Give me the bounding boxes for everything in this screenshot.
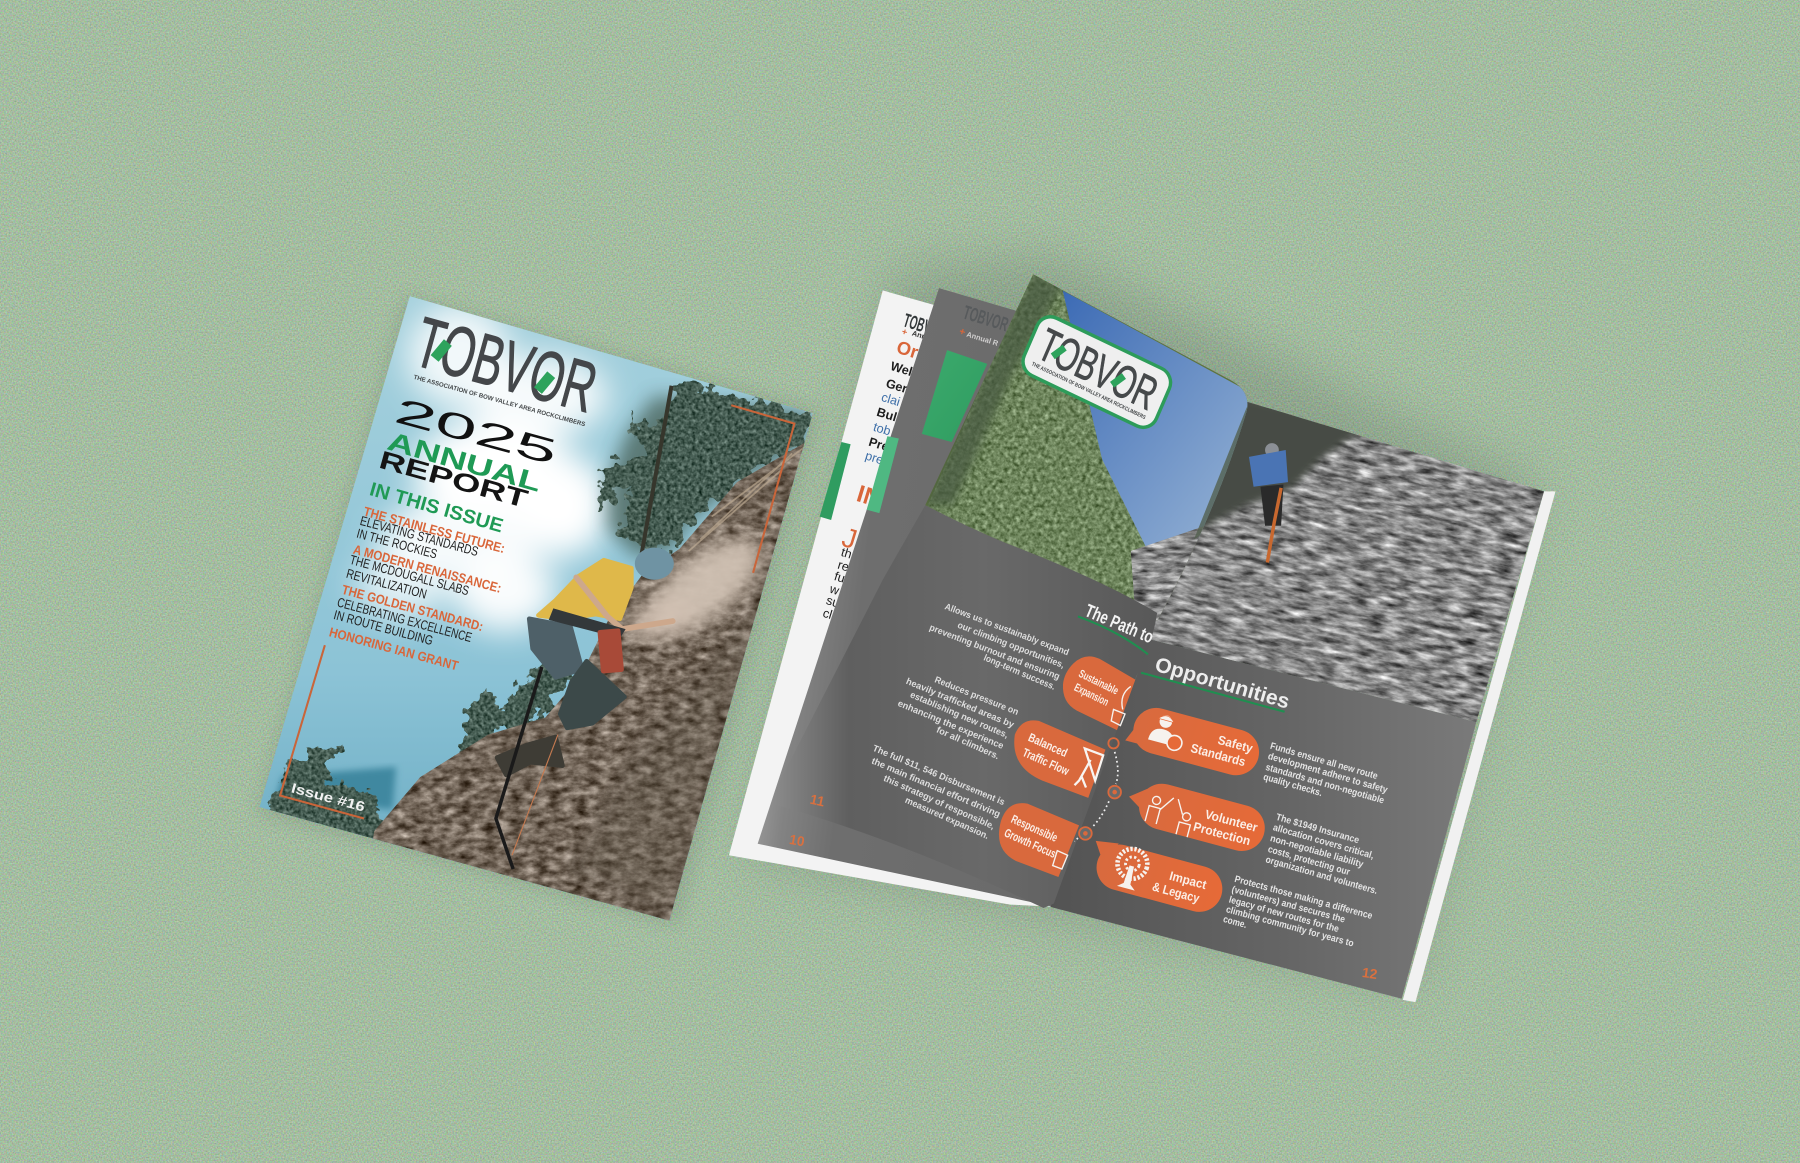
green band on back sheet bbox=[820, 442, 851, 520]
faded logo on middle sheet: TOBVOR bbox=[961, 302, 1011, 336]
icon: tree bbox=[1111, 846, 1151, 892]
logo badge bbox=[1018, 312, 1175, 432]
text: balanced description: for all climbers. bbox=[935, 725, 1001, 761]
cast shadows bbox=[257, 255, 1538, 987]
callout: responsible growth focus: Growth Focus bbox=[1002, 826, 1058, 861]
callout: volunteer protection: Protection bbox=[1192, 820, 1252, 848]
issue number: Issue #16 bbox=[290, 781, 367, 815]
panel: right page bbox=[1050, 402, 1556, 1002]
callout: sustainable expansion bbox=[1063, 656, 1135, 730]
tree and sky photo bbox=[926, 274, 1248, 621]
back sheet text fragments: tob bbox=[872, 420, 892, 438]
text: balanced description: heavily trafficked areas by bbox=[905, 676, 1016, 730]
logo badge: THE ASSOCIATION OF BOW VALLEY AREA ROCKCLIMBERS bbox=[1031, 361, 1147, 421]
back sheet text fragments: J bbox=[839, 521, 861, 555]
text: safety description: standards and non-negotiable bbox=[1264, 762, 1386, 807]
rock face bbox=[373, 443, 804, 920]
orange frame lines bbox=[280, 405, 794, 818]
in this issue list: THE MCDOUGALL SLABS bbox=[348, 552, 471, 598]
back white sheet bbox=[729, 290, 1056, 907]
text: volunteer description bbox=[1264, 812, 1379, 897]
drilling dust cloud bbox=[622, 520, 778, 656]
page 11 grey body bbox=[771, 505, 1157, 908]
callout: impact and legacy bbox=[1085, 838, 1227, 917]
callout: volunteer protection: Volunteer bbox=[1203, 807, 1259, 835]
icon: high five figures bbox=[1144, 792, 1196, 837]
back sheet text fragments: su bbox=[825, 593, 841, 611]
cover title: 2025 Annual Report: 2025 bbox=[391, 390, 562, 473]
callout: safety standards: Safety bbox=[1216, 733, 1254, 756]
callout: volunteer protection bbox=[1123, 776, 1270, 856]
back sheet text fragments: IN bbox=[853, 480, 884, 513]
cover logo: THE ASSOCIATION OF BOW VALLEY AREA ROCKCLIMBERS bbox=[413, 374, 586, 428]
text: safety description: Funds ensure all new route bbox=[1269, 741, 1379, 782]
callout: safety standards bbox=[1124, 702, 1264, 780]
green bands on middle sheet bbox=[922, 350, 987, 442]
text: sustainable description bbox=[928, 601, 1070, 692]
callout: impact and legacy: Impact bbox=[1168, 869, 1209, 892]
back sheet text fragments: pre bbox=[864, 449, 885, 467]
text: sustainable description: preventing burnout and ensuring bbox=[928, 622, 1061, 681]
text: volunteer description: organization and volunteers. bbox=[1264, 854, 1379, 897]
back sheet text fragments: fu bbox=[833, 569, 847, 586]
text: volunteer description: The $1949 Insurance bbox=[1275, 812, 1361, 846]
back sheet text fragments: Wel bbox=[889, 359, 914, 379]
text: balanced description bbox=[896, 674, 1020, 761]
cover logo: TOBVOR bbox=[407, 303, 605, 428]
text: safety description: development adhere to safety bbox=[1267, 751, 1389, 796]
text: responsible description: The full $11, 546 Disbursement is bbox=[871, 743, 1006, 807]
text: impact description bbox=[1222, 874, 1374, 950]
back sheet text fragments: w bbox=[827, 582, 842, 598]
page number 10: 10 bbox=[788, 832, 806, 849]
back sheet text fragments: Or bbox=[894, 336, 921, 363]
logo badge: TOBVOR bbox=[1031, 318, 1165, 420]
in this issue list: ELEVATING STANDARDS bbox=[359, 513, 480, 559]
back sheet text fragments: Ann bbox=[911, 329, 928, 341]
icon: climber on flag bbox=[1074, 748, 1103, 788]
text: impact description: Protects those making a difference bbox=[1233, 874, 1374, 922]
in this issue list: A MODERN RENAISSANCE: bbox=[352, 542, 503, 596]
in this issue list: THE GOLDEN STANDARD: bbox=[340, 582, 485, 634]
in this issue list: IN THIS ISSUE bbox=[367, 478, 506, 537]
text: impact description: legacy of new routes for the bbox=[1228, 895, 1341, 935]
back sheet text fragments: Bul bbox=[875, 405, 899, 424]
panel: front curled page bbox=[810, 274, 1248, 908]
text: responsible description bbox=[870, 743, 1006, 841]
back sheet text fragments: TOBV bbox=[901, 310, 934, 339]
in this issue list: THE STAINLESS FUTURE: bbox=[362, 504, 507, 556]
callout: balanced traffic flow: Balanced bbox=[1026, 730, 1070, 760]
panel: open brochure bbox=[729, 274, 1556, 1002]
climber figure bbox=[496, 548, 674, 869]
text: sustainable description: our climbing opportunities, bbox=[956, 620, 1066, 670]
panel: magazine cover bbox=[253, 287, 827, 941]
cover title: 2025 Annual Report bbox=[376, 390, 562, 514]
timeline dots and nodes bbox=[1074, 738, 1121, 841]
in this issue list: REVITALIZATION bbox=[345, 566, 428, 602]
back sheet text fragments: + bbox=[901, 326, 909, 338]
heading: opportunities: Opportunities bbox=[1152, 653, 1292, 714]
icon: jar bbox=[1053, 851, 1068, 869]
text: impact description: (volunteers) and secures the bbox=[1230, 884, 1347, 926]
callout: sustainable expansion: Sustainable bbox=[1077, 668, 1120, 697]
cover photograph bbox=[253, 287, 827, 941]
rock photo with climber bbox=[1152, 402, 1544, 722]
callout: safety standards: Standards bbox=[1189, 741, 1247, 769]
text: impact description: climbing community for years to bbox=[1225, 904, 1355, 950]
callout: sustainable expansion: Expansion bbox=[1072, 682, 1110, 709]
text: balanced description: enhancing the experience bbox=[896, 698, 1005, 751]
text: volunteer description: non-negotiable liability bbox=[1269, 833, 1365, 871]
back sheet text fragments: Pre bbox=[867, 435, 891, 454]
light green band bbox=[867, 436, 899, 513]
cover title: 2025 Annual Report: REPORT bbox=[376, 446, 531, 514]
distant water bbox=[276, 767, 396, 809]
page number 12: 12 bbox=[1361, 965, 1379, 982]
text: volunteer description: allocation covers critical, bbox=[1272, 822, 1375, 862]
page number 11: 11 bbox=[809, 792, 826, 810]
back sheet text fragments: re bbox=[836, 558, 851, 574]
cover title: 2025 Annual Report: ANNUAL bbox=[384, 426, 545, 498]
callout: balanced traffic flow bbox=[1014, 720, 1105, 798]
text: balanced description: Reduces pressure on bbox=[933, 674, 1020, 717]
icon: hand bbox=[1111, 686, 1131, 726]
text: safety description: quality checks. bbox=[1262, 772, 1324, 799]
callout: responsible growth focus: Responsible bbox=[1009, 812, 1060, 845]
callout: responsible growth focus bbox=[999, 803, 1079, 877]
back sheet text fragments: th bbox=[839, 545, 854, 562]
heading: the path to: The Path to bbox=[1082, 600, 1157, 647]
middle grey sheet bbox=[758, 288, 1054, 907]
text: responsible description: this strategy of responsible, bbox=[882, 773, 996, 831]
icon: worker with shield bbox=[1147, 712, 1188, 752]
back sheet text fragments: cl bbox=[821, 606, 834, 622]
in this issue list: HONORING IAN GRANT bbox=[328, 624, 460, 673]
text: balanced description: establishing new routes, bbox=[909, 690, 1010, 740]
soft tree mass bbox=[608, 396, 813, 557]
pine trees bbox=[266, 385, 813, 855]
text: sustainable description: long-term success. bbox=[982, 653, 1057, 692]
callout: balanced traffic flow: Traffic Flow bbox=[1020, 745, 1072, 778]
rope lines on rock bbox=[689, 448, 804, 551]
text: impact description: come. bbox=[1222, 914, 1248, 931]
back sheet text fragments: clai bbox=[880, 390, 902, 409]
text: sustainable description: Allows us to sustainably expand bbox=[943, 601, 1070, 657]
text: responsible description: measured expansion. bbox=[904, 795, 990, 841]
text: responsible description: the main financial effort driving bbox=[870, 756, 1002, 819]
in this issue list: CELEBRATING EXCELLENCE bbox=[336, 595, 474, 645]
back sheet text fragments bbox=[821, 310, 934, 622]
in this issue list: IN ROUTE BUILDING bbox=[332, 607, 435, 648]
annual report tag on middle sheet: + Annual R bbox=[958, 326, 1000, 349]
text: volunteer description: costs, protecting our bbox=[1267, 844, 1351, 878]
in this issue list bbox=[328, 478, 507, 673]
back sheet text fragments: Ger bbox=[884, 376, 909, 396]
in this issue list: IN THE ROCKIES bbox=[355, 526, 439, 562]
cover logo bbox=[407, 303, 605, 428]
text: safety description bbox=[1262, 741, 1389, 807]
callout: impact and legacy: & Legacy bbox=[1151, 880, 1201, 906]
